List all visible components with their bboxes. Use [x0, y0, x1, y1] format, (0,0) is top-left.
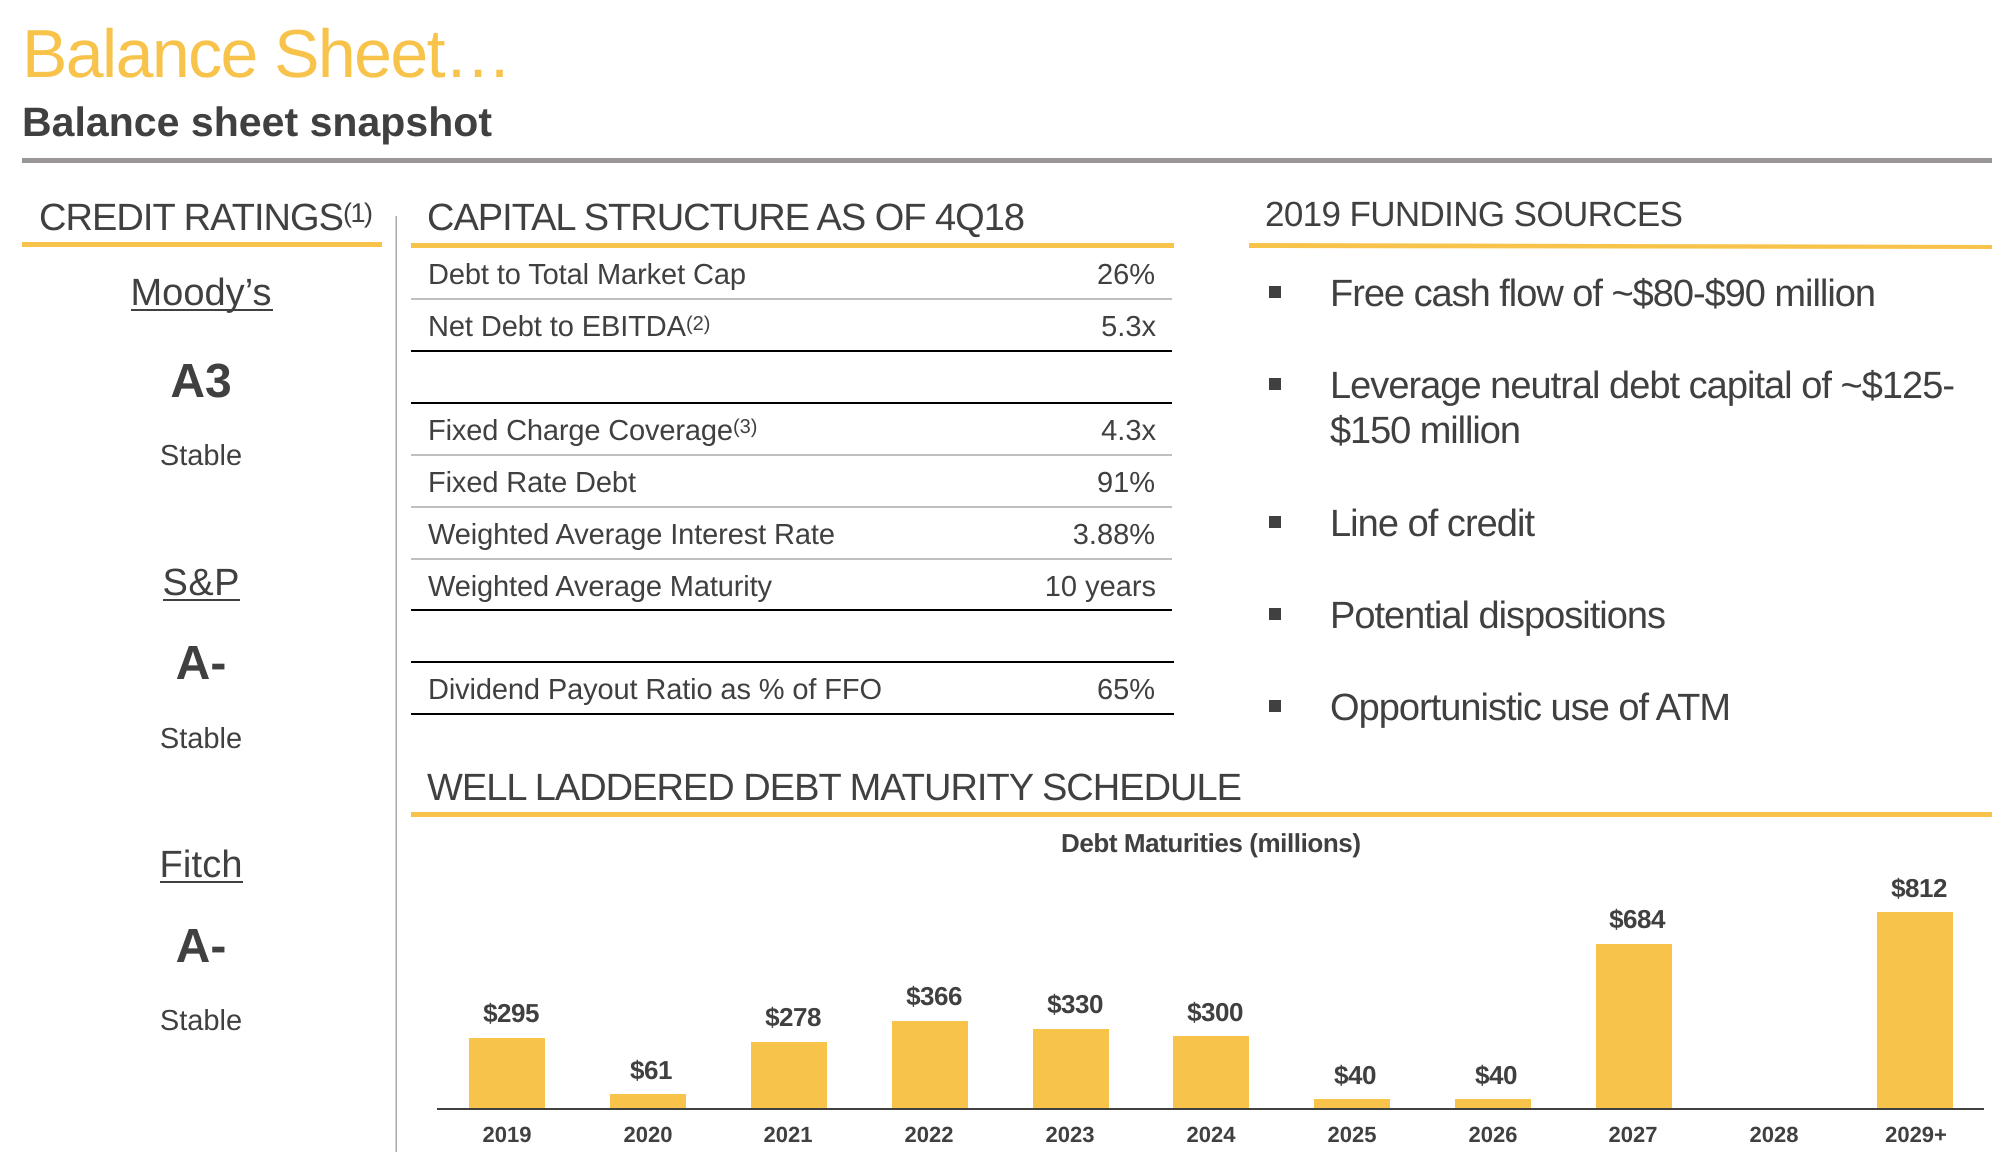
- bar chart: $330: [1047, 989, 1103, 1019]
- bullet: opportunistic use of ATM: Opportunistic use of ATM: [1330, 687, 1731, 729]
- rating: Moody's: [130, 272, 273, 472]
- heading: funding sources: 2019 FUNDING SOURCES: [1265, 195, 1683, 234]
- row: weighted average maturity: 10 years: [1045, 571, 1156, 603]
- subtitle: Balance sheet snapshot: [22, 99, 492, 145]
- row: debt to total market cap: [428, 259, 1155, 291]
- bar chart: $684: [1609, 904, 1666, 934]
- title: Balance Sheet…: [22, 16, 512, 92]
- rating: Fitch: [160, 844, 243, 1037]
- bar chart: 2023: [1046, 1122, 1094, 1147]
- panel: debt maturity schedule: [411, 767, 1992, 1147]
- bar chart: [437, 873, 1984, 1147]
- row: fixed charge coverage: Fixed Charge Coverage: [428, 415, 733, 447]
- row: fixed rate debt: [428, 467, 1155, 499]
- bar chart: 2021: [764, 1122, 812, 1147]
- heading: debt maturity schedule: WELL LADDERED DEBT MATURITY SCHEDULE: [427, 767, 1242, 809]
- row: fixed rate debt: Fixed Rate Debt: [428, 467, 636, 499]
- heading: debt maturity schedule: [411, 767, 1992, 817]
- bullet: line of credit: Line of credit: [1330, 503, 1535, 545]
- heading: credit ratings: CREDIT RATINGS: [39, 197, 344, 239]
- bar chart: $366: [906, 981, 962, 1011]
- bar chart: 2027: [1609, 1122, 1657, 1147]
- bar chart: 2025: [1328, 1122, 1376, 1147]
- bullet: potential dispositions: Potential dispositions: [1330, 595, 1666, 637]
- heading: capital structure: [411, 197, 1174, 248]
- row: net debt to EBITDA: (2): [686, 313, 710, 335]
- row: weighted average interest rate: Weighted Average Interest Rate: [428, 519, 835, 551]
- rating: S&P: S&P: [162, 562, 240, 604]
- rating: S&P: [160, 562, 242, 755]
- panel: capital structure: [411, 197, 1174, 715]
- panel: credit ratings: [22, 197, 382, 1037]
- row: fixed charge coverage: [428, 415, 1156, 447]
- row: weighted average maturity: [428, 571, 1156, 603]
- bar chart: $300: [1187, 997, 1243, 1027]
- rating: Moody's: Moody’s: [130, 272, 272, 314]
- bar chart: 2029+: [1885, 1122, 1947, 1147]
- bullet: free cash flow: Free cash flow of ~$80-$90 million: [1330, 273, 1876, 315]
- bullet: leverage neutral debt capital: $150 million: [1330, 410, 1521, 452]
- bar chart: 2026: [1469, 1122, 1517, 1147]
- rating: Fitch: Stable: [160, 1005, 242, 1037]
- chart title: Debt Maturities (millions): [1061, 828, 1361, 858]
- row: fixed charge coverage: (3): [733, 416, 757, 438]
- rating: Fitch: Fitch: [160, 844, 242, 886]
- row: dividend payout ratio: [428, 674, 1155, 706]
- rating: Moody's: Stable: [160, 440, 242, 472]
- bar chart: $40: [1334, 1060, 1376, 1090]
- bar chart: $61: [630, 1055, 672, 1085]
- bar chart: 2019: [483, 1122, 531, 1147]
- bar chart: $40: [1475, 1060, 1517, 1090]
- bar chart: 2022: [905, 1122, 953, 1147]
- row: debt to total market cap: Debt to Total Market Cap: [428, 259, 746, 291]
- panel: funding sources: [1249, 195, 1992, 729]
- heading: funding sources: [1249, 195, 1992, 249]
- row: net debt to EBITDA: [428, 311, 1156, 343]
- row: net debt to EBITDA: 5.3x: [1101, 311, 1156, 343]
- bullet: leverage neutral debt capital: [1269, 365, 1955, 452]
- rating: S&P: A-: [176, 637, 226, 690]
- bar chart: $812: [1891, 873, 1947, 903]
- row: dividend payout ratio: 65%: [1097, 674, 1155, 706]
- row: dividend payout ratio: Dividend Payout Ratio as % of FFO: [428, 674, 882, 706]
- heading: capital structure: CAPITAL STRUCTURE AS OF 4Q18: [427, 197, 1025, 239]
- rating: Fitch: A-: [176, 920, 226, 973]
- bar chart: 2028: [1750, 1122, 1798, 1147]
- row: fixed rate debt: 91%: [1097, 467, 1155, 499]
- bar chart: $295: [483, 998, 539, 1028]
- row: debt to total market cap: 26%: [1097, 259, 1155, 291]
- bullet: leverage neutral debt capital: Leverage neutral debt capital of ~$125-: [1330, 365, 1955, 407]
- heading: credit ratings: (1): [343, 198, 373, 228]
- row: weighted average interest rate: 3.88%: [1073, 519, 1155, 551]
- row: weighted average maturity: Weighted Average Maturity: [428, 571, 772, 603]
- rating: Moody's: A3: [170, 355, 232, 408]
- rating: S&P: Stable: [160, 723, 242, 755]
- row: weighted average interest rate: [428, 519, 1155, 551]
- bar chart: $278: [765, 1002, 821, 1032]
- bar chart: 2024: [1187, 1122, 1236, 1147]
- row: fixed charge coverage: 4.3x: [1101, 415, 1156, 447]
- row: net debt to EBITDA: Net Debt to EBITDA: [428, 311, 687, 343]
- bar chart: 2020: [624, 1122, 672, 1147]
